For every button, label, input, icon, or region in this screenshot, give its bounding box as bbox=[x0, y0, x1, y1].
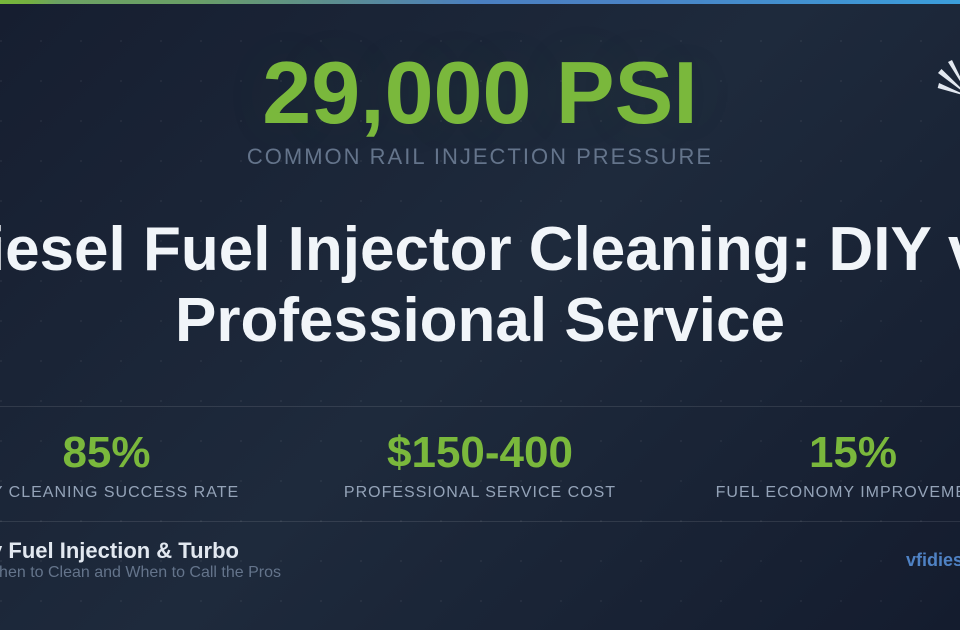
top gradient bar bbox=[0, 0, 960, 4]
stat: success rate: 85% bbox=[62, 428, 151, 477]
divider: stats top bbox=[0, 406, 960, 407]
stat: service cost bbox=[344, 428, 616, 501]
divider: stats bottom bbox=[0, 521, 960, 522]
stat: fuel economy bbox=[716, 428, 960, 501]
hero statistic label: COMMON RAIL INJECTION PRESSURE bbox=[247, 144, 713, 169]
stats row bbox=[0, 428, 960, 501]
title: Professional Service bbox=[175, 286, 785, 355]
stat: fuel economy: 15% bbox=[809, 428, 897, 477]
stat: service cost: $150-400 bbox=[387, 428, 573, 477]
stat: service cost: PROFESSIONAL SERVICE COST bbox=[344, 484, 616, 501]
title bbox=[0, 215, 960, 355]
icon: burst rays bbox=[938, 60, 960, 94]
stat: success rate bbox=[0, 428, 239, 501]
hero statistic: 29,000 PSI bbox=[262, 43, 698, 142]
